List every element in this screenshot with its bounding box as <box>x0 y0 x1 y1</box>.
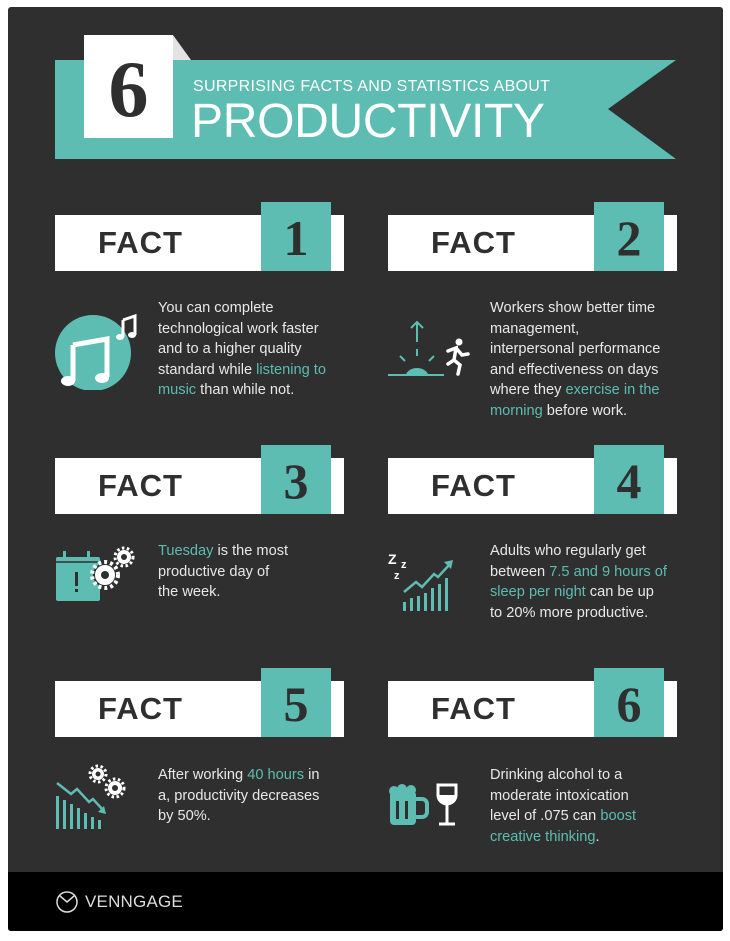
text fact 6: level of .075 can boost <box>490 808 636 824</box>
icon: beer and wine <box>389 784 458 826</box>
text fact 5: a, productivity decreases <box>158 788 319 804</box>
fact 1 header: FACT <box>98 225 183 260</box>
text fact 2: and effectiveness on days <box>490 362 658 378</box>
icon: sleep chart: z <box>394 570 400 582</box>
text fact 5 <box>158 767 319 824</box>
icon: calendar gears <box>56 546 134 601</box>
fact 1 header: 1 <box>284 210 308 266</box>
text fact 1: standard while listening to <box>158 362 326 378</box>
fact 5 header <box>55 668 344 737</box>
icon: sleep chart <box>388 551 453 611</box>
text fact 2 <box>490 300 660 418</box>
fact 6 header: 6 <box>616 676 642 732</box>
fact 1 header <box>55 202 344 271</box>
title: PRODUCTIVITY <box>191 95 545 148</box>
fact 3 header: FACT <box>98 468 183 503</box>
text fact 6: moderate intoxication <box>490 788 629 804</box>
fact 2 header: FACT <box>431 225 516 260</box>
icon: sleep chart: Z <box>388 551 397 567</box>
text fact 1: and to a higher quality <box>158 341 302 357</box>
text fact 4: between 7.5 and 9 hours of <box>490 564 667 580</box>
fact 3 header: 3 <box>284 453 308 509</box>
fact 2 header <box>388 202 677 271</box>
subtitle: SURPRISING FACTS AND STATISTICS ABOUT <box>193 78 550 95</box>
fact 6 header: FACT <box>431 691 516 726</box>
fact 5 header: 5 <box>284 676 308 732</box>
fact 6 header <box>388 668 677 737</box>
text fact 6: Drinking alcohol to a <box>490 767 622 783</box>
text fact 3: Tuesday is the most <box>158 543 288 559</box>
text fact 3 <box>158 543 288 600</box>
fact 2 header: 2 <box>616 210 642 266</box>
logo: VENNGAGE <box>85 892 183 911</box>
banner <box>55 35 676 159</box>
fact 4 header <box>388 445 677 514</box>
text fact 1 <box>158 300 326 398</box>
icon: sleep chart: z <box>401 559 407 571</box>
text fact 2: Workers show better time <box>490 300 655 316</box>
text fact 2: morning before work. <box>490 402 627 418</box>
text fact 4 <box>490 543 667 620</box>
text fact 2: where they exercise in the <box>490 382 660 398</box>
footer <box>8 872 723 931</box>
big number 6: 6 <box>108 46 148 134</box>
text fact 6 <box>490 767 636 844</box>
icon: music <box>55 314 136 390</box>
text fact 1: You can complete <box>158 300 273 316</box>
text fact 3: productive day of <box>158 564 269 580</box>
text fact 2: interpersonal performance <box>490 341 660 357</box>
text fact 1: technological work faster <box>158 320 319 336</box>
text fact 5: by 50%. <box>158 808 211 824</box>
text fact 4: to 20% more productive. <box>490 604 648 620</box>
logo <box>56 891 183 913</box>
text fact 3: the week. <box>158 584 220 600</box>
fact 4 header: 4 <box>616 453 642 509</box>
text fact 5: After working 40 hours in <box>158 767 319 783</box>
fact 4 header: FACT <box>431 468 516 503</box>
icon: sunrise runner <box>388 320 470 376</box>
text fact 1: music than while not. <box>158 382 294 398</box>
text fact 2: management, <box>490 320 579 336</box>
icon: declining chart gears <box>56 764 126 829</box>
text fact 4: sleep per night can be up <box>490 584 654 600</box>
text fact 6: creative thinking. <box>490 828 600 844</box>
fact 5 header: FACT <box>98 691 183 726</box>
fact 3 header <box>55 445 344 514</box>
text fact 4: Adults who regularly get <box>490 543 646 559</box>
